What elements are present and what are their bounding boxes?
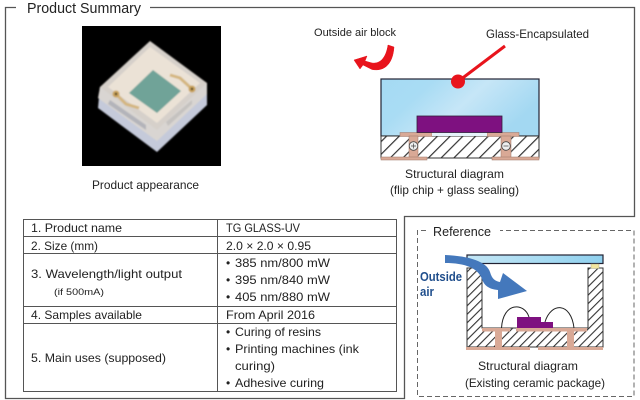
spec table <box>24 220 396 392</box>
row: product name <box>31 221 300 235</box>
row: wavelength: 395 nm/840 mW <box>235 273 331 287</box>
copper traces <box>466 328 603 350</box>
row: main uses: • <box>226 325 230 339</box>
row: wavelength: • <box>226 290 230 304</box>
row: wavelength: (if 500mA) <box>54 287 104 297</box>
row: size <box>31 239 311 253</box>
glass lid <box>467 255 603 264</box>
pointer: glass-encapsulated <box>451 46 505 88</box>
label: glass-encapsulated: Glass-Encapsulated <box>486 27 589 41</box>
row: product name: TG GLASS-UV <box>226 221 300 235</box>
caption: structural diagram existing ceramic package: (Existing ceramic package) <box>465 376 605 390</box>
diagram: flip chip glass sealing <box>381 79 539 160</box>
row: main uses: • <box>226 342 230 356</box>
row: samples <box>31 308 315 322</box>
row: wavelength <box>31 256 331 304</box>
arrow: outside air block <box>354 45 394 70</box>
bond wires <box>502 307 574 328</box>
panel: reference <box>418 224 634 396</box>
caption: structural diagram existing ceramic package <box>465 359 605 390</box>
package walls <box>467 268 603 347</box>
row: wavelength: • <box>226 273 230 287</box>
label: outside air <box>420 270 462 299</box>
row: main uses: curing) <box>235 359 275 373</box>
caption: structural diagram flip chip: (flip chip + glass sealing) <box>390 183 519 197</box>
caption: product appearance: Product appearance <box>92 178 199 192</box>
row: wavelength: 3. Wavelength/light output <box>31 267 183 281</box>
row: wavelength: 405 nm/880 mW <box>235 290 331 304</box>
caption: structural diagram existing ceramic package: Structural diagram <box>478 359 578 373</box>
row: size: 2.0 × 2.0 × 0.95 <box>226 239 311 253</box>
caption: structural diagram flip chip: Structural diagram <box>405 167 504 181</box>
led chip <box>417 116 502 132</box>
label: outside air: Outside <box>420 270 462 284</box>
caption: structural diagram flip chip <box>390 167 519 197</box>
row: main uses: Curing of resins <box>235 325 321 339</box>
diagram: existing ceramic package <box>466 255 603 350</box>
row: samples: 4. Samples available <box>31 308 142 322</box>
row: samples: From April 2016 <box>226 308 315 322</box>
row: main uses: 5. Main uses (supposed) <box>31 351 166 365</box>
heading: product summary: Product Summary <box>27 1 142 17</box>
label: outside air block: Outside air block <box>314 27 396 39</box>
led chip <box>517 317 553 328</box>
product photo <box>82 26 221 166</box>
arrow: outside air <box>445 255 527 299</box>
heading: reference: Reference <box>433 224 491 239</box>
table grid <box>24 220 396 392</box>
row: size: 2. Size (mm) <box>31 239 98 253</box>
hatched substrate <box>381 136 539 158</box>
glass body <box>381 79 539 136</box>
row: main uses: Adhesive curing <box>235 376 324 390</box>
row: wavelength: 385 nm/800 mW <box>235 256 331 270</box>
row: main uses: Printing machines (ink <box>235 342 360 356</box>
row: main uses <box>31 325 360 390</box>
label: outside air: air <box>420 285 434 299</box>
row: wavelength: • <box>226 256 230 270</box>
row: product name: 1. Product name <box>31 221 122 235</box>
row: main uses: • <box>226 376 230 390</box>
